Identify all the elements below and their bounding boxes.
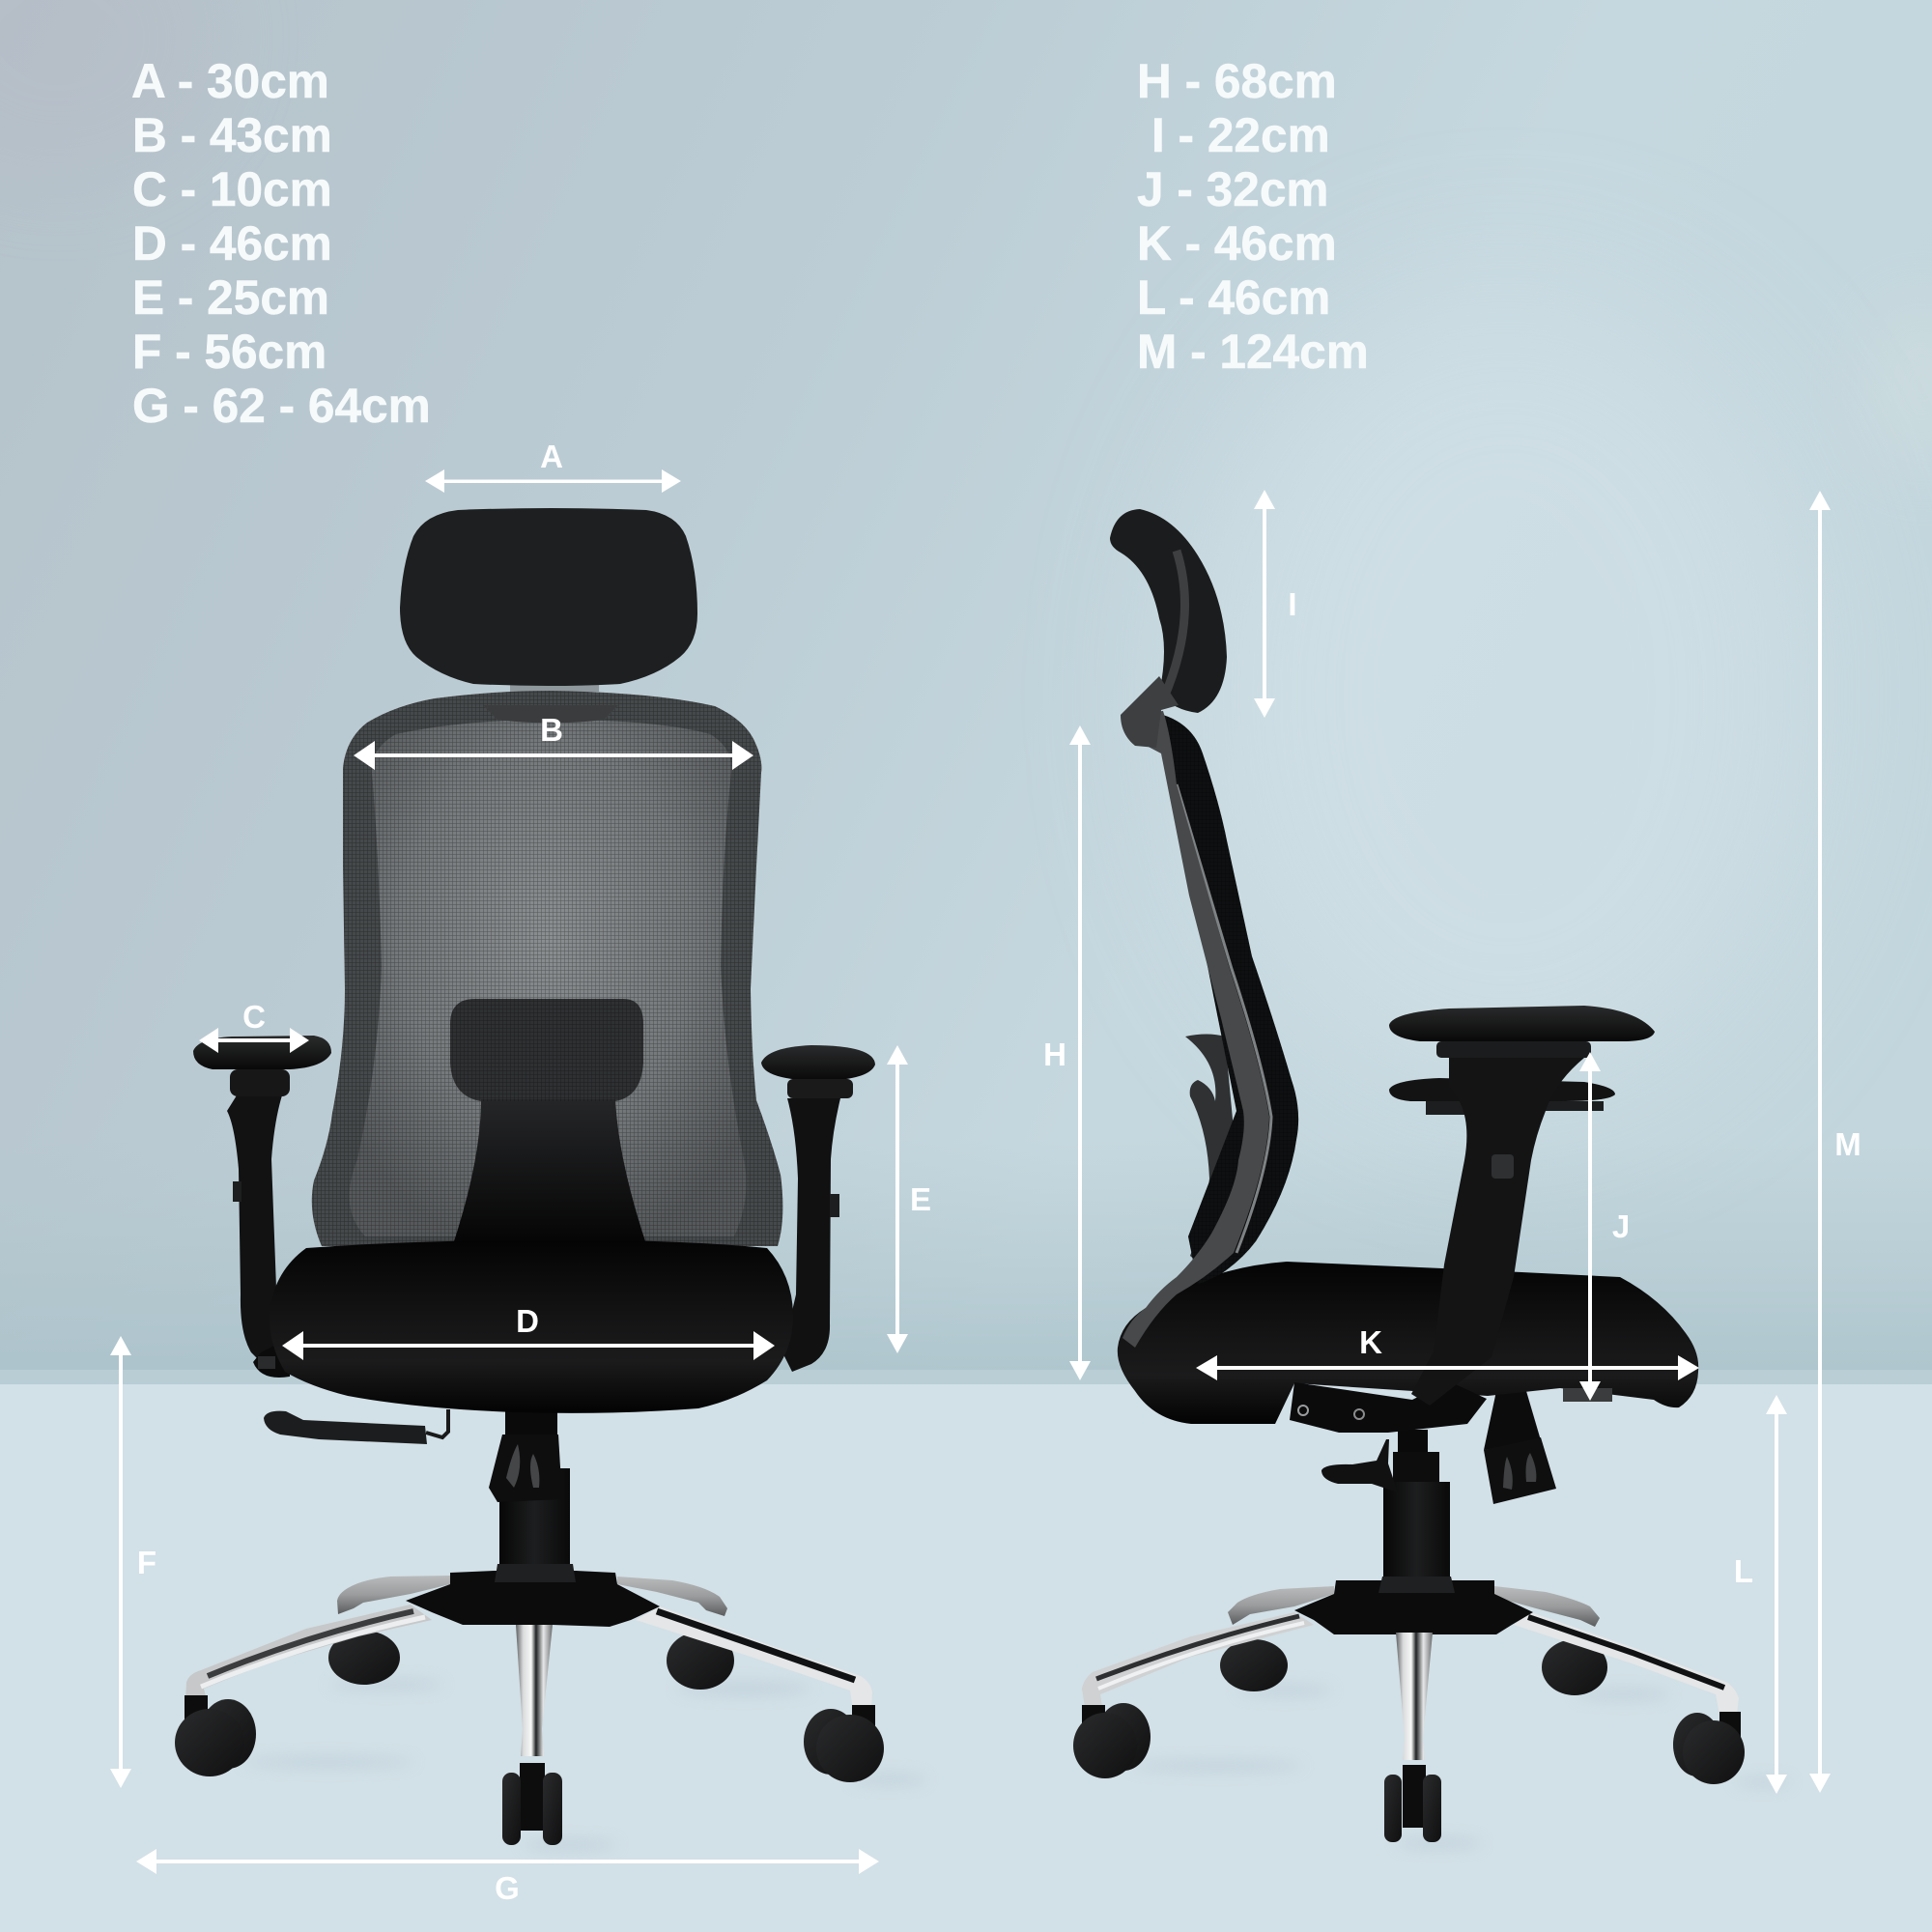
arrow D bbox=[282, 1331, 775, 1360]
legend: front view dimensions: F - 56cm bbox=[132, 325, 327, 379]
headrest support: front chair bbox=[510, 682, 599, 692]
chair: side view bbox=[1073, 509, 1792, 1848]
legend: side view dimensions: H - 68cm bbox=[1137, 54, 1337, 108]
legend: front view dimensions: G - 62 - 64cm bbox=[132, 379, 431, 433]
label A: A bbox=[540, 439, 563, 474]
label H: H bbox=[1043, 1037, 1066, 1072]
label D: D bbox=[516, 1303, 539, 1339]
lumbar support: front chair bbox=[450, 999, 646, 1244]
headrest: side chair bbox=[1110, 509, 1227, 748]
label K: K bbox=[1359, 1324, 1382, 1360]
seat mechanism: side chair bbox=[1290, 1381, 1612, 1433]
legend: side view dimensions bbox=[1137, 54, 1369, 379]
legend: front view dimensions: C - 10cm bbox=[132, 162, 332, 216]
arrow B bbox=[354, 741, 753, 770]
casters: front chair bbox=[175, 1695, 884, 1845]
casters: side chair bbox=[1073, 1703, 1745, 1842]
label I: I bbox=[1288, 586, 1297, 622]
rear casters: side chair bbox=[1220, 1639, 1607, 1695]
label M: M bbox=[1834, 1126, 1861, 1162]
label F: F bbox=[137, 1545, 156, 1580]
arrow J bbox=[1579, 1052, 1601, 1401]
legend: front view dimensions: A - 30cm bbox=[131, 54, 329, 108]
arrow E bbox=[887, 1045, 908, 1353]
arrow G bbox=[136, 1849, 879, 1874]
label G: G bbox=[495, 1870, 520, 1906]
floor shadows: side chair bbox=[1130, 1686, 1792, 1848]
legend: front view dimensions: B - 43cm bbox=[132, 108, 332, 162]
rear casters: front chair bbox=[328, 1631, 734, 1690]
back frame: side chair bbox=[1122, 711, 1269, 1348]
height lever: front chair bbox=[264, 1409, 448, 1444]
legend: side view dimensions: K - 46cm bbox=[1137, 216, 1337, 270]
legend: front view dimensions: E - 25cm bbox=[132, 270, 329, 325]
legend: front view dimensions: D - 46cm bbox=[132, 216, 332, 270]
front-left base arm: side chair bbox=[1082, 1612, 1314, 1707]
arrow K bbox=[1196, 1355, 1699, 1380]
headrest: front chair bbox=[400, 508, 697, 686]
front-left base arm: front chair bbox=[185, 1605, 432, 1700]
arrow M bbox=[1809, 491, 1831, 1793]
gas lift: front chair bbox=[489, 1410, 576, 1582]
arrow L bbox=[1766, 1395, 1787, 1794]
right armrest: front chair bbox=[761, 1045, 875, 1372]
seat cushion: front chair bbox=[270, 1240, 793, 1413]
seat cushion: side chair bbox=[1118, 1262, 1698, 1424]
arrow A bbox=[425, 469, 681, 493]
arrow I bbox=[1254, 490, 1275, 718]
arrow C bbox=[199, 1028, 309, 1053]
front-right base arm: side chair bbox=[1514, 1612, 1739, 1715]
chair: front view bbox=[175, 508, 927, 1850]
rear base arms: side chair bbox=[1228, 1586, 1600, 1627]
armrest: side chair bbox=[1389, 1006, 1655, 1406]
mesh backrest: side chair bbox=[1163, 715, 1298, 1285]
mesh backrest: front chair bbox=[312, 691, 782, 1246]
base hub: side chair bbox=[1294, 1580, 1533, 1634]
front-right base arm: front chair bbox=[636, 1606, 872, 1711]
label J: J bbox=[1612, 1208, 1630, 1244]
arrow F bbox=[110, 1336, 131, 1788]
front base arm: side chair bbox=[1396, 1633, 1433, 1760]
front base arm: front chair bbox=[516, 1625, 553, 1756]
legend: side view dimensions: I - 22cm bbox=[1151, 108, 1330, 162]
legend: side view dimensions: L - 46cm bbox=[1137, 270, 1330, 325]
tilt knob: side chair bbox=[1484, 1391, 1556, 1504]
rear base arms: front chair bbox=[337, 1576, 727, 1616]
base hub: front chair bbox=[406, 1571, 660, 1627]
label L: L bbox=[1734, 1553, 1753, 1589]
floor shadows: front chair bbox=[242, 1680, 927, 1850]
lumbar bracket: side chair bbox=[1185, 1034, 1235, 1261]
legend: front view dimensions bbox=[131, 54, 431, 433]
label C: C bbox=[242, 999, 266, 1035]
legend: side view dimensions: J - 32cm bbox=[1137, 162, 1329, 216]
gas lift: side chair bbox=[1321, 1430, 1455, 1593]
left armrest: front chair bbox=[193, 1036, 331, 1378]
label E: E bbox=[910, 1181, 931, 1217]
legend: side view dimensions: M - 124cm bbox=[1137, 325, 1369, 379]
label B: B bbox=[540, 712, 563, 748]
arrow H bbox=[1069, 725, 1091, 1380]
